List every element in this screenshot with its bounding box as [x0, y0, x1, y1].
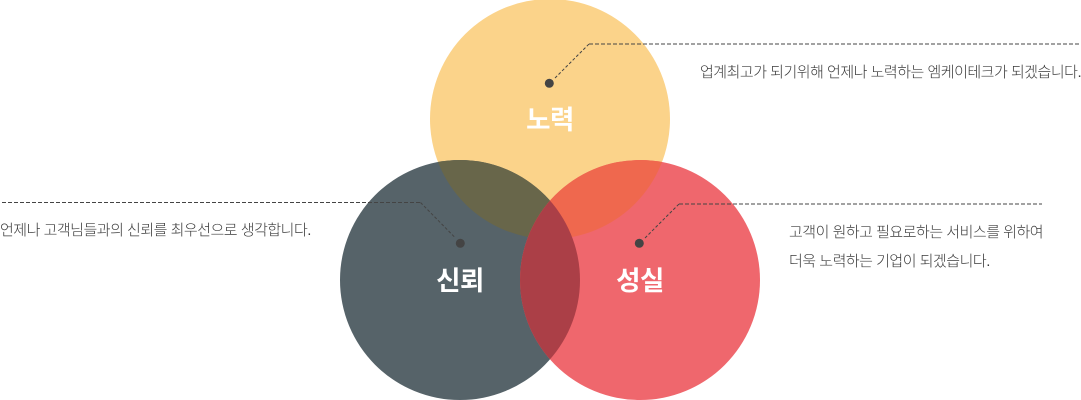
- text: 성실 description: 고객이 원하고 필요로하는 서비스를 위하여: [789, 224, 1043, 241]
- text: 신뢰 description: 언제나 고객님들과의 신뢰를 최우선으로 생각합니다.: [0, 222, 311, 239]
- circle: 성실 (red): [520, 160, 760, 400]
- circle: 신뢰 (slate): [340, 160, 580, 400]
- overlap: yellow and slate: [438, 160, 550, 237]
- leader line: 성실: [635, 204, 1042, 248]
- heading: 노력: 노력: [526, 105, 574, 135]
- overlap: slate and red: [520, 200, 580, 360]
- overlap: yellow and red: [528, 160, 662, 237]
- circle: 노력 (yellow): [430, 0, 670, 239]
- leader line: 신뢰: [2, 202, 465, 248]
- heading: 신뢰: 신뢰: [436, 266, 484, 296]
- text: 성실 description: 더욱 노력하는 기업이 되겠습니다.: [789, 253, 990, 270]
- text: 성실 description: [789, 224, 1043, 270]
- text: 노력 description: 업계최고가 되기위해 언제나 노력하는 엠케이테크가 되겠습니다.: [700, 64, 1081, 81]
- heading: 성실: 성실: [616, 266, 664, 296]
- leader line: 노력: [545, 44, 1079, 88]
